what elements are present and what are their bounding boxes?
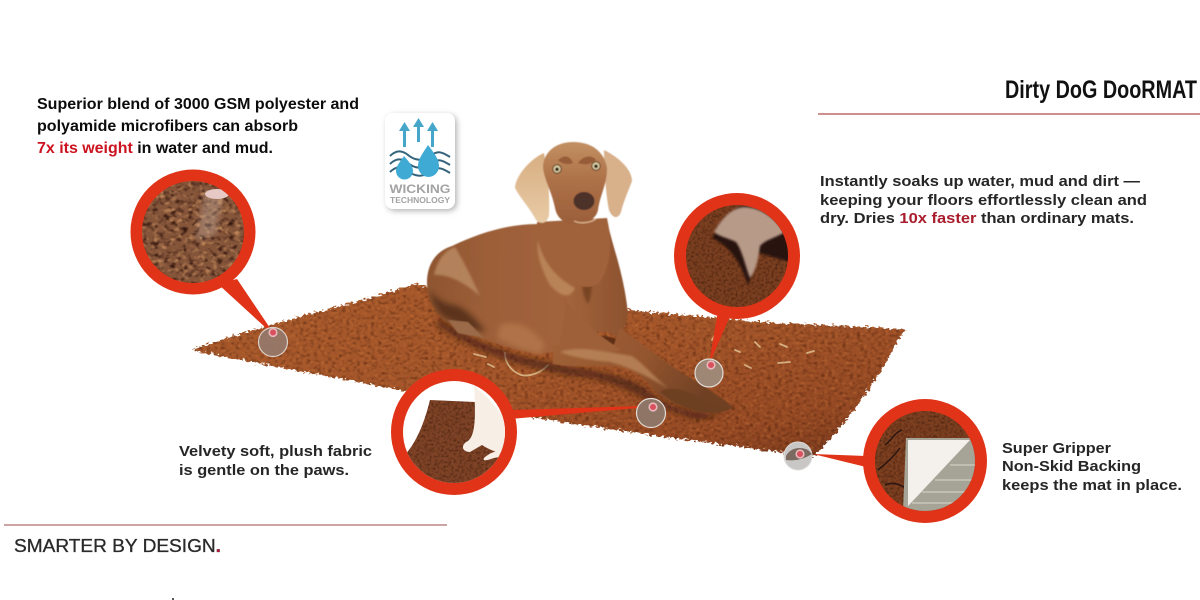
dog upper foreleg: [556, 298, 622, 352]
text block: non-skid backing: Super Gripper: [1002, 440, 1111, 457]
marker 1: [258, 328, 288, 356]
dog paw toes: [660, 389, 733, 413]
doormat: [192, 284, 905, 457]
dog brow highlights: [558, 156, 596, 164]
dog head: [543, 142, 607, 224]
text block: absorbency: Superior blend of 3000 GSM polyester and: [37, 96, 359, 113]
dog thigh highlight: [434, 247, 480, 296]
dog neck: [537, 218, 610, 287]
text block: absorbency: [37, 96, 359, 157]
marker 3: [636, 398, 666, 428]
text block: quick drying: keeping your floors effortlessly clean and: [820, 192, 1147, 209]
dog left ear: [515, 153, 549, 223]
callout 3: plush fabric close-up: [391, 369, 638, 495]
dog chest shadow: [582, 262, 591, 304]
dog left eye: [553, 165, 561, 173]
text block: quick drying: [820, 173, 1147, 227]
icon: wicking technology badge: WICKING: [390, 182, 450, 196]
dog mouth: [574, 219, 596, 223]
text block: velvety soft: is gentle on the paws.: [179, 462, 349, 479]
bottom left divider: [4, 524, 447, 526]
dog body: [427, 220, 628, 354]
mat stitched paw pattern: [474, 335, 814, 376]
clipped mark at bottom edge: [172, 598, 174, 600]
dog forelegs: [553, 328, 733, 413]
marker 4: [784, 442, 812, 470]
dog right ear: [604, 150, 632, 217]
dog hind paw: [448, 320, 484, 338]
text block: velvety soft: Velvety soft, plush fabric: [179, 443, 372, 460]
dog nose: [574, 192, 594, 210]
text block: non-skid backing: Non-Skid Backing: [1002, 458, 1141, 475]
dog: [427, 142, 733, 420]
text block: quick drying: dry. Dries 10x faster than ordinary mats.: [820, 210, 1134, 227]
icon: wicking technology badge: [385, 113, 455, 209]
text block: quick drying: Instantly soaks up water, mud and dirt —: [820, 173, 1140, 190]
text block: velvety soft: [179, 443, 372, 479]
text block: non-skid backing: [1002, 440, 1182, 494]
text block: absorbency: polyamide microfibers can absorb: [37, 118, 298, 135]
tagline: SMARTER BY DESIGN .: [14, 536, 221, 556]
dog pupils: [555, 164, 598, 171]
dog foreleg highlight: [560, 349, 668, 388]
dog haunch shading: [430, 290, 486, 332]
text block: absorbency: 7x its weight in water and mud.: [37, 140, 273, 157]
gap between the legs: [580, 336, 618, 350]
dog chest highlight: [538, 240, 575, 295]
callout 4: non-skid backing close-up: [813, 399, 987, 523]
dog right eye: [592, 162, 600, 170]
icon: wicking technology badge: TECHNOLOGY: [390, 195, 450, 205]
marker 2: [695, 359, 723, 387]
callout 1: microfiber close-up: [130, 170, 270, 328]
callout 2: quick absorb close-up: [674, 193, 800, 358]
dog belly tone: [497, 323, 545, 354]
text block: non-skid backing: keeps the mat in place.: [1002, 477, 1182, 494]
dog shadow on mat: [436, 318, 728, 420]
top right divider: [818, 113, 1200, 115]
